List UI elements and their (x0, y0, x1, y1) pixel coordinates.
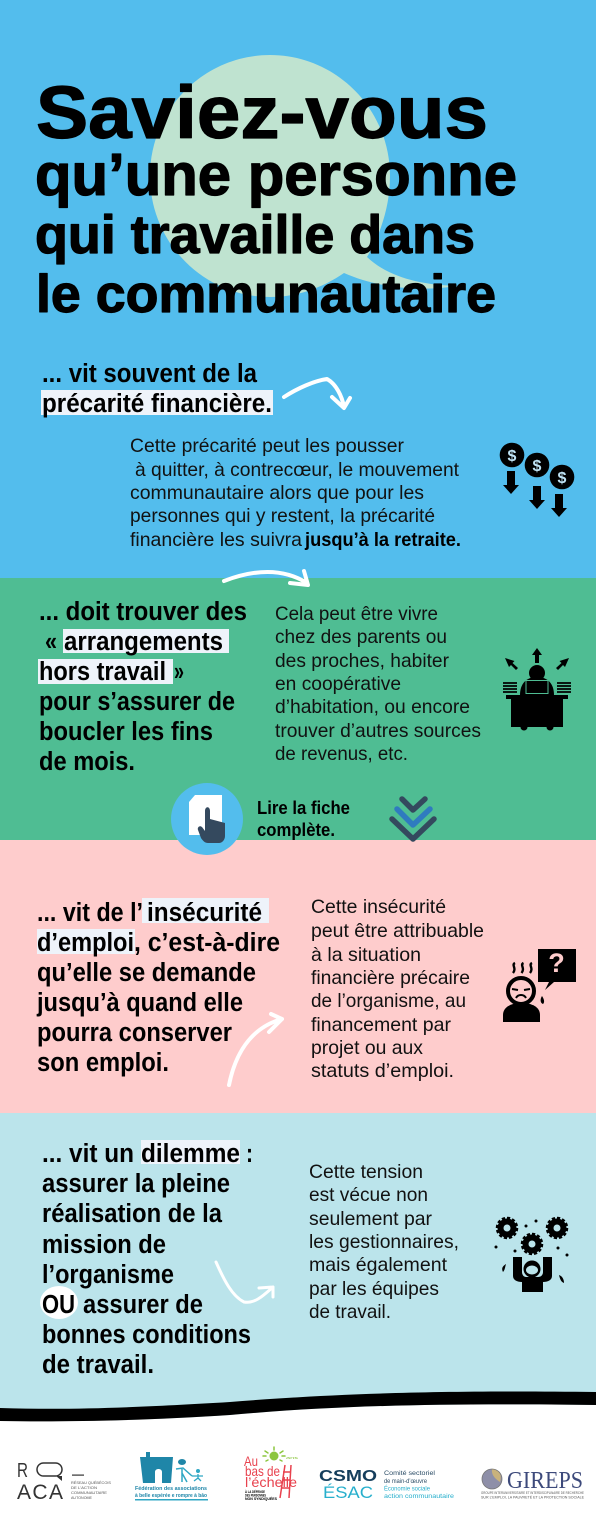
text block: précarité: financière les suivra (130, 529, 302, 551)
heading: dilemme (40, 1140, 253, 1379)
heading: arrangements hors travail: de mois. (39, 748, 135, 776)
icon: person at desk (503, 648, 571, 730)
call to action: read the full sheet (171, 783, 434, 855)
text block: insécurité: projet ou aux (311, 1037, 423, 1059)
logo: RQ-ACA: DE L’ACTION (71, 1485, 97, 1490)
heading: dilemme: ... vit un (42, 1140, 134, 1168)
speech bubble (150, 55, 457, 297)
icon: falling dollar coins: $ (533, 458, 542, 475)
text block: insécurité: financière précaire (311, 967, 470, 989)
heading: insécurité d'emploi: pourra conserver (37, 1019, 232, 1047)
logo: Au bas de l'échelle: À LA DÉFENSE (245, 1489, 265, 1494)
heading: arrangements hors travail: pour s’assurer de (39, 688, 235, 716)
logo: Au bas de l'échelle: l’échelle (245, 1474, 297, 1490)
icon: worried person with question bubble (503, 948, 576, 1022)
heading: insécurité d'emploi (36, 898, 280, 1077)
logo: Au bas de l'échelle: Au (244, 1453, 258, 1469)
icon: person juggling gears (494, 1218, 568, 1292)
link text: Lire la fiche (257, 798, 350, 818)
text block: arrangements: des proches, habiter (275, 650, 449, 672)
icon: falling dollar coins: $ (508, 448, 517, 465)
logo: CSMO-ÉSAC: action communautaire (384, 1493, 454, 1500)
arrow: heading to text (229, 1014, 282, 1085)
heading: arrangements hors travail (38, 598, 247, 776)
text block: précarité: jusqu’à la retraite. (304, 529, 461, 551)
text block: insécurité: à la situation (311, 944, 421, 966)
icon: hand on document (171, 783, 243, 855)
logo: CSMO-ÉSAC: ÉSAC (323, 1483, 373, 1502)
text block: tension: les gestionnaires, (309, 1231, 459, 1253)
text block: arrangements (275, 603, 481, 765)
logo: GIREPS (481, 1468, 585, 1500)
heading: insécurité d'emploi: jusqu’à quand elle (36, 989, 243, 1017)
heading: précarité financière: précarité financière. (42, 390, 272, 418)
panel: blue header and precarity section (0, 0, 596, 578)
heading: dilemme: l’organisme (42, 1261, 174, 1289)
logo: RQ-ACA: COMMUNAUTAIRE (71, 1490, 107, 1495)
text block: arrangements: en coopérative (275, 673, 401, 695)
text block: insécurité (311, 896, 484, 1082)
logo: RQ-ACA: R (17, 1460, 28, 1482)
logo: Fédération des associations: Fédération des associations (135, 1486, 207, 1492)
arrow: heading to text (216, 1262, 273, 1302)
heading: dilemme: bonnes conditions (42, 1321, 251, 1349)
text block: arrangements: trouver d’autres sources (275, 720, 481, 742)
text block: tension: par les équipes (309, 1278, 439, 1300)
heading: arrangements hors travail: « (45, 628, 57, 656)
logo: Au bas de l'échelle: ans (286, 1455, 298, 1460)
heading: dilemme: assurer la pleine (42, 1170, 230, 1198)
logo: CSMO-ÉSAC: Économie sociale (384, 1484, 430, 1492)
text block: tension: seulement par (309, 1208, 432, 1230)
heading: dilemme: : (246, 1140, 253, 1168)
text block: tension: mais également (309, 1254, 448, 1276)
icon: falling dollar coins (500, 443, 574, 517)
logo: CSMO-ÉSAC: Comité sectoriel (384, 1470, 436, 1477)
heading: insécurité d'emploi: , c’est-à-dire (134, 929, 280, 957)
logo: Au bas de l'échelle (244, 1447, 298, 1501)
arrow: heading to text (284, 379, 350, 408)
heading: arrangements hors travail: boucler les fins (39, 718, 213, 746)
text block: précarité: Cette précarité peut les pousser (130, 435, 404, 457)
title: le communautaire (36, 265, 496, 324)
text block: précarité: communautaire alors que pour les (130, 482, 424, 504)
logo: RQ-ACA (17, 1460, 111, 1504)
heading: dilemme: mission de (42, 1231, 166, 1259)
logo: RQ-ACA: ACA (17, 1481, 63, 1504)
text block: précarité: à quitter, à contrecœur, le mouvement (135, 459, 460, 481)
heading: arrangements hors travail: arrangements (64, 628, 223, 656)
text block: arrangements: Cela peut être vivre (275, 603, 438, 625)
text block: précarité: personnes qui y restent, la précarité (130, 505, 435, 527)
logo: RQ-ACA: RÉSEAU QUÉBÉCOIS (71, 1480, 111, 1485)
heading: insécurité d'emploi: qu’elle se demande (37, 959, 256, 987)
text block: arrangements: chez des parents ou (275, 626, 447, 648)
wave stroke (0, 1391, 596, 1421)
logo: Fédération des associations: à belle espérée e rompre à bâo (135, 1493, 207, 1499)
link text (257, 798, 350, 840)
heading: dilemme: OU (42, 1291, 75, 1319)
heading: dilemme: de travail. (42, 1351, 154, 1379)
logo: RQ-ACA: AUTONOME (71, 1495, 92, 1500)
link text: complète. (257, 820, 335, 840)
title (35, 71, 517, 324)
panel: light blue section, dilemme (0, 1113, 596, 1423)
panel: green section, arrangements (0, 571, 596, 840)
heading: dilemme: dilemme (141, 1140, 240, 1168)
logo: CSMO-ÉSAC: de main-d’œuvre (384, 1478, 427, 1485)
icon: worried person with question bubble: ? (548, 948, 565, 978)
heading: dilemme: assurer de (83, 1291, 203, 1319)
heading: insécurité d'emploi: insécurité (147, 899, 262, 927)
text block: tension (309, 1161, 459, 1323)
text block: tension: est vécue non (309, 1184, 428, 1206)
heading: arrangements hors travail: » (174, 658, 184, 686)
logo: Au bas de l'échelle: bas de (245, 1463, 280, 1479)
heading: arrangements hors travail: hors travail (39, 658, 166, 686)
heading: insécurité d'emploi: son emploi. (37, 1049, 169, 1077)
heading: insécurité d'emploi: ... vit de l’ (37, 899, 143, 927)
logo: CSMO-ÉSAC: CSMO (319, 1468, 377, 1485)
title: Saviez-vous (36, 71, 488, 154)
text block: insécurité: de l’organisme, au (311, 990, 466, 1012)
logo: GIREPS: GIREPS (507, 1468, 583, 1494)
title: qui travaille dans (35, 205, 475, 265)
text block: précarité (130, 435, 461, 551)
logo: Fédération des associations (135, 1452, 208, 1500)
text block: tension: de travail. (309, 1301, 391, 1323)
heading: dilemme: réalisation de la (42, 1200, 223, 1228)
logo: Au bas de l'échelle: NON SYNDIQUÉES (245, 1496, 277, 1501)
text block: insécurité: statuts d’emploi. (311, 1060, 454, 1082)
logo: Au bas de l'échelle: DES PERSONNES (245, 1494, 266, 1498)
title: qu’une personne (35, 142, 517, 208)
text block: insécurité: financement par (311, 1014, 451, 1036)
heading: arrangements hors travail: ... doit trouver des (39, 598, 247, 626)
heading: insécurité d'emploi: d’emploi (37, 929, 134, 957)
text block: insécurité: Cette insécurité (311, 896, 446, 918)
footer background (0, 1404, 596, 1536)
heading: précarité financière: ... vit souvent de la (42, 360, 258, 388)
heading: précarité financière (41, 360, 273, 418)
icon: falling dollar coins: $ (558, 470, 567, 487)
panel: pink section, insécurité d'emploi (0, 840, 596, 1113)
logo: GIREPS: GROUPE INTERUNIVERSITAIRE ET INTERDISCIPLINAIRE DE RECHERCHE (481, 1491, 585, 1495)
logo: CSMO-ÉSAC (319, 1468, 454, 1502)
text block: arrangements: de revenus, etc. (275, 743, 408, 765)
text block: arrangements: d’habitation, ou encore (275, 696, 470, 718)
logo: GIREPS: SUR L’EMPLOI, LA PAUVRETÉ ET LA PROTECTION SOCIALE (481, 1494, 585, 1500)
text block: tension: Cette tension (309, 1161, 423, 1183)
icon: triple chevron (392, 799, 434, 839)
text block: insécurité: peut être attribuable (311, 920, 484, 942)
arrow: crossing into green section (224, 571, 308, 585)
